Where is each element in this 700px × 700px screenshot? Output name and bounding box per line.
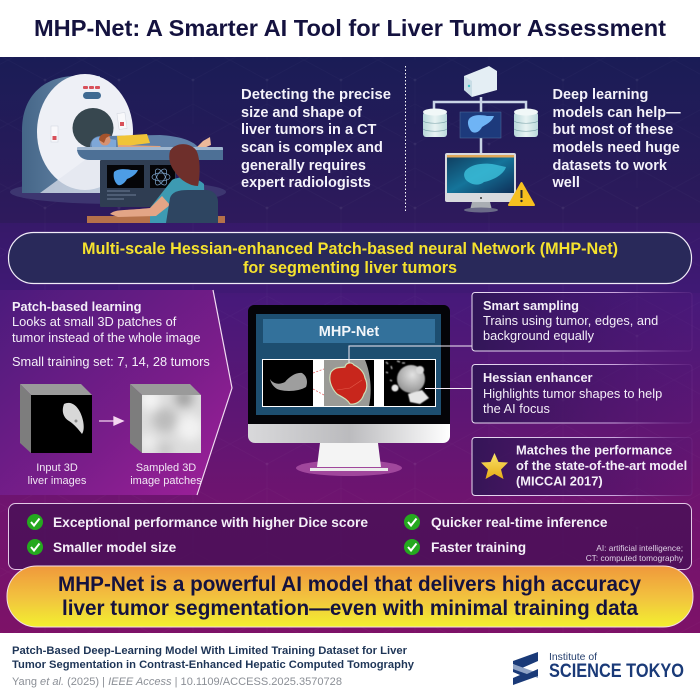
text: deep learning limitation (552, 87, 681, 191)
text: performance statement (516, 442, 687, 488)
cube: sampled 3D image patches (130, 384, 203, 457)
panel: Hessian enhancer: Hessian enhancer (483, 370, 593, 385)
text: performance statement: (MICCAI 2017) (516, 474, 603, 488)
text: performance statement: Matches the performance (516, 442, 672, 458)
benefit labels: Exceptional performance with higher Dice score (53, 515, 368, 530)
panel: Hessian enhancer: the AI focus (483, 401, 550, 416)
text: problem statement: liver tumors in a CT (241, 122, 377, 138)
icon: star (481, 453, 508, 479)
text: deep learning limitation: models need huge (552, 140, 680, 156)
panel: smart sampling: Trains using tumor, edges, and (483, 313, 658, 328)
text: problem statement: size and shape of (241, 105, 362, 121)
illustration: CT scanner with radiologist (10, 74, 226, 223)
text: patch-based learning description: tumor instead of the whole image (12, 330, 201, 345)
scan: Hessian enhanced tumor (384, 360, 435, 406)
heading pill: MHP-Net definition (8, 232, 692, 284)
caption: sampled patches: image patches (130, 475, 202, 487)
text: deep learning limitation: but most of these (552, 122, 673, 138)
conclusion pill: liver tumor segmentation—even with minimal training data (62, 596, 639, 620)
benefit labels: Quicker real-time inference (431, 515, 608, 530)
text: problem statement: expert radiologists (241, 175, 371, 191)
monitor: MHP-Net (248, 305, 450, 476)
panel: benefits checklist (8, 504, 692, 570)
text: problem statement: Detecting the precise (241, 87, 391, 103)
abbreviations note: AI: artificial intelligence; (596, 543, 683, 553)
icon: check (404, 514, 420, 530)
scan: segmented tumor in red (324, 360, 374, 406)
heading pill: MHP-Net definition: for segmenting liver tumors (243, 259, 457, 277)
panel: Hessian enhancer: Highlights tumor shapes to help (483, 386, 662, 401)
text: deep learning limitation: datasets to work (552, 158, 668, 174)
connector: monitor to Hessian enhancer (425, 388, 472, 390)
text: problem statement: scan is complex and (241, 140, 383, 156)
text: deep learning limitation: models can help— (552, 105, 681, 121)
arrow: sampling (99, 417, 123, 425)
icon: check (404, 539, 420, 555)
panel: smart sampling (472, 292, 692, 351)
caption: input images: Input 3D (36, 462, 78, 474)
benefit labels (53, 515, 608, 555)
connector: monitor to smart sampling (349, 346, 472, 363)
panel: smart sampling: Smart sampling (483, 298, 579, 313)
caption: sampled patches (130, 462, 202, 487)
illustration: server, databases and monitor with warning (423, 66, 538, 212)
conclusion pill: MHP-Net is a powerful AI model that delivers high accuracy (58, 572, 641, 596)
citation: Tumor Segmentation in Contrast-Enhanced Hepatic Computed Tomography (12, 659, 415, 671)
text: patch-based learning description: Small training set: 7, 14, 28 tumors (12, 354, 210, 369)
text: patch-based learning description: Looks at small 3D patches of (12, 314, 177, 329)
conclusion pill (7, 566, 693, 627)
caption: sampled patches: Sampled 3D (136, 462, 196, 474)
panel: performance match (472, 438, 692, 496)
text: performance statement: of the state-of-the-art model (516, 458, 687, 473)
panel: smart sampling: background equally (483, 328, 595, 343)
text: patch-based learning description: Patch-based learning (12, 299, 141, 314)
text: deep learning limitation: Deep learning (552, 87, 648, 103)
caption: input images (28, 462, 87, 487)
citation: Yang et al. (2025) | IEEE Access | 10.1109/ACCESS.2025.3570728 (12, 676, 342, 688)
benefit labels: Smaller model size (53, 540, 177, 555)
icon: check (27, 539, 43, 555)
text: problem statement (241, 87, 391, 191)
logo: Institute of Science Tokyo (513, 651, 684, 685)
text: deep learning limitation: well (552, 175, 580, 191)
logo: Institute of Science Tokyo: Institute of (549, 651, 597, 663)
benefit labels: Faster training (431, 540, 526, 555)
icon: check (27, 514, 43, 530)
title: MHP-Net: A Smarter AI Tool for Liver Tumor Assessment (34, 15, 666, 41)
scan: liver slice (263, 360, 313, 406)
panel: Hessian enhancer (472, 364, 692, 423)
text: patch-based learning description (12, 299, 210, 369)
cube: input 3D liver image (20, 384, 92, 453)
divider (404, 66, 406, 213)
monitor: MHP-Net: MHP-Net (319, 324, 379, 340)
caption: input images: liver images (28, 475, 87, 487)
citation: Patch-Based Deep-Learning Model With Limited Training Dataset for Liver (12, 645, 408, 657)
text: problem statement: generally requires (241, 158, 366, 174)
citation (12, 645, 415, 688)
abbreviations note (586, 543, 684, 563)
abbreviations note: CT: computed tomography (586, 553, 684, 563)
heading pill: MHP-Net definition: Multi-scale Hessian-enhanced Patch-based neural Network (MHP-Net) (82, 240, 618, 258)
panel: patch-based learning arrow (0, 290, 232, 495)
